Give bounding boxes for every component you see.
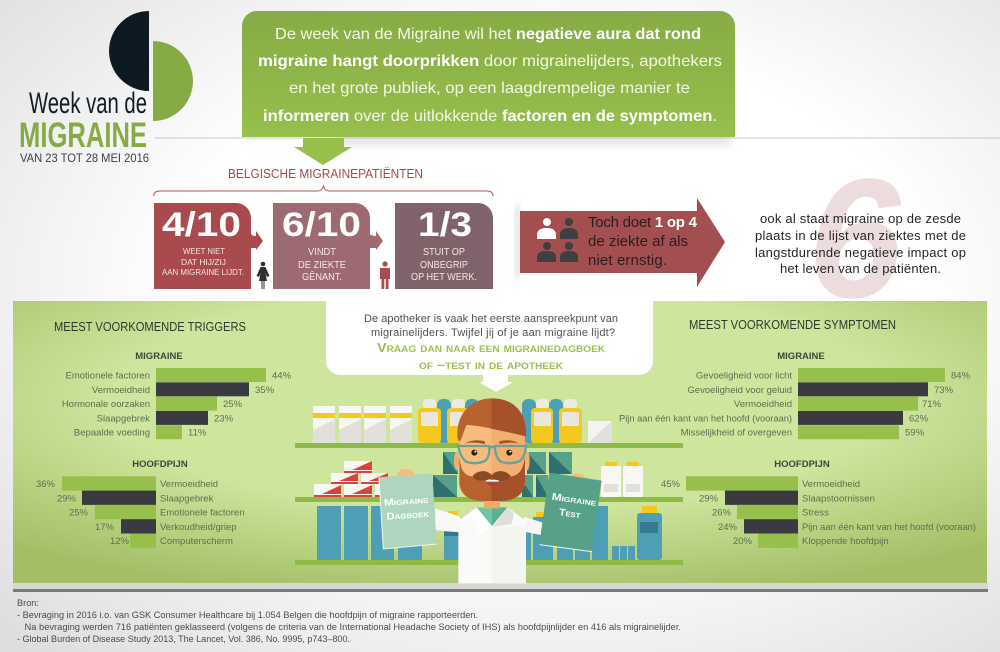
labels: Stress bbox=[802, 508, 829, 518]
hands bbox=[397, 469, 586, 487]
percentages bbox=[188, 370, 292, 438]
percentages: 59% bbox=[905, 428, 925, 438]
stat: 1/3: 1/3 bbox=[418, 206, 472, 244]
pharmacist illustration bbox=[379, 398, 602, 583]
stat: 1/3 bbox=[395, 203, 493, 289]
book: Migraine Test: Migraine bbox=[551, 492, 597, 509]
intro text bbox=[258, 26, 722, 125]
logo bbox=[19, 11, 193, 165]
bubble call to action bbox=[377, 340, 606, 372]
sources: - Bevraging in 2016 i.o. van GSK Consumer Healthcare bij 1.054 Belgen die hoofdpijn of migraine rapporteerden. bbox=[17, 610, 478, 620]
logo text bbox=[19, 87, 149, 165]
percentages: 73% bbox=[934, 385, 954, 396]
hair bbox=[457, 398, 526, 442]
arrow down from intro bbox=[294, 138, 352, 165]
labels: Gevoeligheid voor licht bbox=[696, 370, 792, 382]
icon: man bbox=[380, 261, 390, 289]
percentages: 29% bbox=[699, 493, 719, 504]
stat: 1/3: ONBEGRIP bbox=[420, 260, 468, 271]
labels: Hormonale oorzaken bbox=[62, 399, 150, 410]
percentages bbox=[905, 370, 971, 438]
stat: 1/3: STUIT OP bbox=[423, 247, 465, 258]
labels: Misselijkheid of overgeven bbox=[681, 428, 792, 438]
icon: woman bbox=[256, 262, 270, 289]
bars bbox=[62, 476, 156, 548]
callout text: Toch doet 1 op 4 bbox=[588, 214, 698, 231]
percentages: 23% bbox=[214, 413, 234, 424]
lab coat bbox=[435, 507, 543, 583]
text: sixth place: het leven van de patiënten. bbox=[780, 261, 941, 276]
book: Migraine Dagboek: Dagboek bbox=[386, 509, 430, 523]
stat: 1/3: OP HET WERK. bbox=[411, 272, 477, 283]
labels: Vermoeidheid bbox=[802, 479, 860, 490]
percentages: 71% bbox=[922, 399, 942, 410]
symptoms title: MEEST VOORKOMENDE SYMPTOMEN bbox=[689, 317, 896, 332]
text: sixth place bbox=[755, 211, 966, 276]
percentages: 17% bbox=[95, 522, 115, 533]
labels: Emotionele factoren bbox=[160, 508, 244, 518]
labels: Kloppende hoofdpijn bbox=[802, 536, 889, 547]
middle shelf boxes bbox=[433, 452, 572, 497]
text: sixth place: plaats in de lijst van ziektes met de bbox=[755, 228, 966, 243]
stat: 4/10: 4/10 bbox=[162, 206, 241, 244]
mouth bbox=[485, 478, 500, 486]
bars bbox=[686, 476, 798, 548]
percentages: 25% bbox=[223, 399, 243, 410]
bars bbox=[156, 368, 266, 439]
brace bbox=[154, 186, 493, 196]
labels: Slaapgebrek bbox=[160, 493, 214, 504]
labels: Emotionele factoren bbox=[66, 370, 150, 382]
percentages: 62% bbox=[909, 413, 929, 424]
labels bbox=[802, 479, 976, 547]
speech bubble bbox=[326, 301, 653, 392]
intro text: migraine hangt doorprikken door migrainelijders, apothekers bbox=[258, 53, 722, 70]
logo text: MIGRAINE bbox=[19, 116, 147, 155]
bars bbox=[798, 368, 945, 439]
percentages: 24% bbox=[718, 522, 738, 533]
stat: 4/10: DAT HIJ/ZIJ bbox=[181, 257, 226, 267]
labels bbox=[619, 370, 792, 438]
sources: - Global Burden of Disease Study 2013, The Lancet, Vol. 386, No. 9995, p743–800. bbox=[17, 634, 350, 644]
percentages bbox=[661, 479, 753, 547]
symptoms migraine chart: MIGRAINE bbox=[777, 351, 825, 362]
stat: 4/10: AAN MIGRAINE LIJDT. bbox=[162, 267, 244, 277]
labels: Gevoeligheid voor geluid bbox=[687, 385, 792, 396]
bubble call to action: Vraag dan naar een migrainedagboek bbox=[377, 340, 606, 355]
labels: Bepaalde voeding bbox=[74, 428, 150, 438]
bubble text: migrainelijders. Twijfel jij of je aan migraine lijdt? bbox=[371, 327, 615, 339]
eyebrows bbox=[465, 440, 485, 444]
symptoms headache chart bbox=[661, 459, 976, 548]
red stacked packs bbox=[314, 461, 388, 497]
percentages: 26% bbox=[712, 508, 732, 518]
sources: Bron: bbox=[17, 598, 39, 608]
stat: 4/10: WEET NIET bbox=[183, 246, 225, 256]
logo text: VAN 23 TOT 28 MEI 2016 bbox=[20, 153, 149, 165]
callout text bbox=[588, 214, 698, 269]
shelf boards bbox=[295, 443, 683, 565]
stat: 4/10 bbox=[154, 203, 263, 289]
intro panel bbox=[242, 11, 735, 137]
callout text: de ziekte af als bbox=[588, 233, 688, 250]
triggers title: MEEST VOORKOMENDE TRIGGERS bbox=[54, 319, 246, 334]
labels: Pijn aan één kant van het hoofd (vooraan) bbox=[619, 413, 792, 424]
labels: Pijn aan één kant van het hoofd (vooraan) bbox=[802, 522, 976, 533]
book: Migraine Test: Test bbox=[558, 507, 582, 521]
percentages: 20% bbox=[733, 536, 753, 547]
glasses bbox=[458, 446, 526, 463]
beard bbox=[459, 457, 525, 501]
stat: 6/10 bbox=[273, 203, 383, 289]
symptoms headache chart: HOOFDPIJN bbox=[774, 459, 830, 470]
intro text: en het grote publiek, op een laagdrempelige manier te bbox=[289, 80, 690, 97]
symptoms migraine chart bbox=[619, 351, 971, 439]
percentages: 84% bbox=[951, 370, 971, 382]
labels: Verkoudheid/griep bbox=[160, 522, 237, 533]
percentages: 25% bbox=[69, 508, 89, 518]
callout text: niet ernstig. bbox=[588, 252, 667, 269]
icon: four people, one highlighted bbox=[537, 218, 578, 262]
bubble text: De apotheker is vaak het eerste aanspreekpunt van bbox=[364, 313, 618, 325]
labels: Slaapstoornissen bbox=[802, 493, 875, 504]
triggers headache chart bbox=[36, 459, 244, 548]
triggers migraine chart bbox=[62, 351, 292, 439]
percentages: 11% bbox=[188, 428, 207, 438]
sources bbox=[17, 598, 681, 644]
book: Migraine Test bbox=[539, 473, 602, 552]
pharmacy shelves bbox=[295, 399, 683, 565]
labels bbox=[160, 479, 244, 547]
stat: 6/10: VINDT bbox=[308, 247, 336, 258]
logo dark half circle bbox=[109, 11, 149, 91]
labels: Vermoeidheid bbox=[734, 399, 792, 410]
sources: Na bevraging werden 716 patiënten geklasseerd (volgens de criteria van de International Headache Society of IHS) als hoofdpijnlijder en 416 als migrainelijder. bbox=[24, 622, 681, 632]
heading: Belgische migrainepatiënten: BELGISCHE MIGRAINEPATIËNTEN bbox=[228, 166, 423, 181]
percentages: 12% bbox=[110, 536, 130, 547]
arrow callout: 1 op 4 bbox=[520, 198, 725, 287]
logo green half circle bbox=[153, 41, 193, 121]
percentages bbox=[36, 479, 130, 547]
symptoms section bbox=[619, 317, 976, 548]
triggers headache chart: HOOFDPIJN bbox=[132, 459, 188, 470]
bubble call to action: of –test in de apotheek bbox=[419, 357, 564, 372]
moustache bbox=[473, 471, 511, 481]
percentages: 44% bbox=[272, 370, 292, 382]
labels: Computerscherm bbox=[160, 536, 233, 547]
intro text: De week van de Migraine wil het negatieve aura dat rond bbox=[275, 26, 701, 43]
labels: Vermoeidheid bbox=[160, 479, 218, 490]
labels: Slaapgebrek bbox=[97, 413, 150, 424]
stat: 6/10: GÊNANT. bbox=[302, 270, 342, 283]
percentages: 29% bbox=[57, 493, 77, 504]
text: sixth place: ook al staat migraine op de zesde bbox=[760, 211, 961, 226]
stat: 6/10: 6/10 bbox=[282, 206, 361, 244]
book: Migraine Dagboek bbox=[379, 473, 437, 549]
bubble text bbox=[364, 313, 618, 339]
big number 6: 6 bbox=[798, 144, 919, 334]
percentages: 45% bbox=[661, 479, 681, 490]
book: Migraine Dagboek: Migraine bbox=[384, 495, 430, 509]
white jars right bbox=[601, 462, 643, 497]
green panel bbox=[13, 301, 988, 592]
triggers migraine chart: MIGRAINE bbox=[135, 351, 183, 362]
neck bbox=[484, 498, 500, 508]
bottom shelf blue packs and bottles bbox=[317, 506, 662, 560]
text: sixth place: langstdurende negatieve impact op bbox=[755, 245, 966, 260]
head bbox=[454, 398, 530, 501]
percentages: 36% bbox=[36, 479, 56, 490]
logo text: Week van de bbox=[29, 87, 147, 120]
labels bbox=[62, 370, 150, 438]
stat: 6/10: DE ZIEKTE bbox=[298, 260, 346, 271]
intro text: informeren over de uitlokkende factoren en de symptomen . bbox=[263, 108, 717, 125]
percentages: 35% bbox=[255, 385, 275, 396]
top shelf jars bbox=[313, 399, 612, 443]
triggers section bbox=[36, 319, 292, 548]
eyes bbox=[471, 450, 512, 456]
labels: Vermoeidheid bbox=[92, 385, 150, 396]
